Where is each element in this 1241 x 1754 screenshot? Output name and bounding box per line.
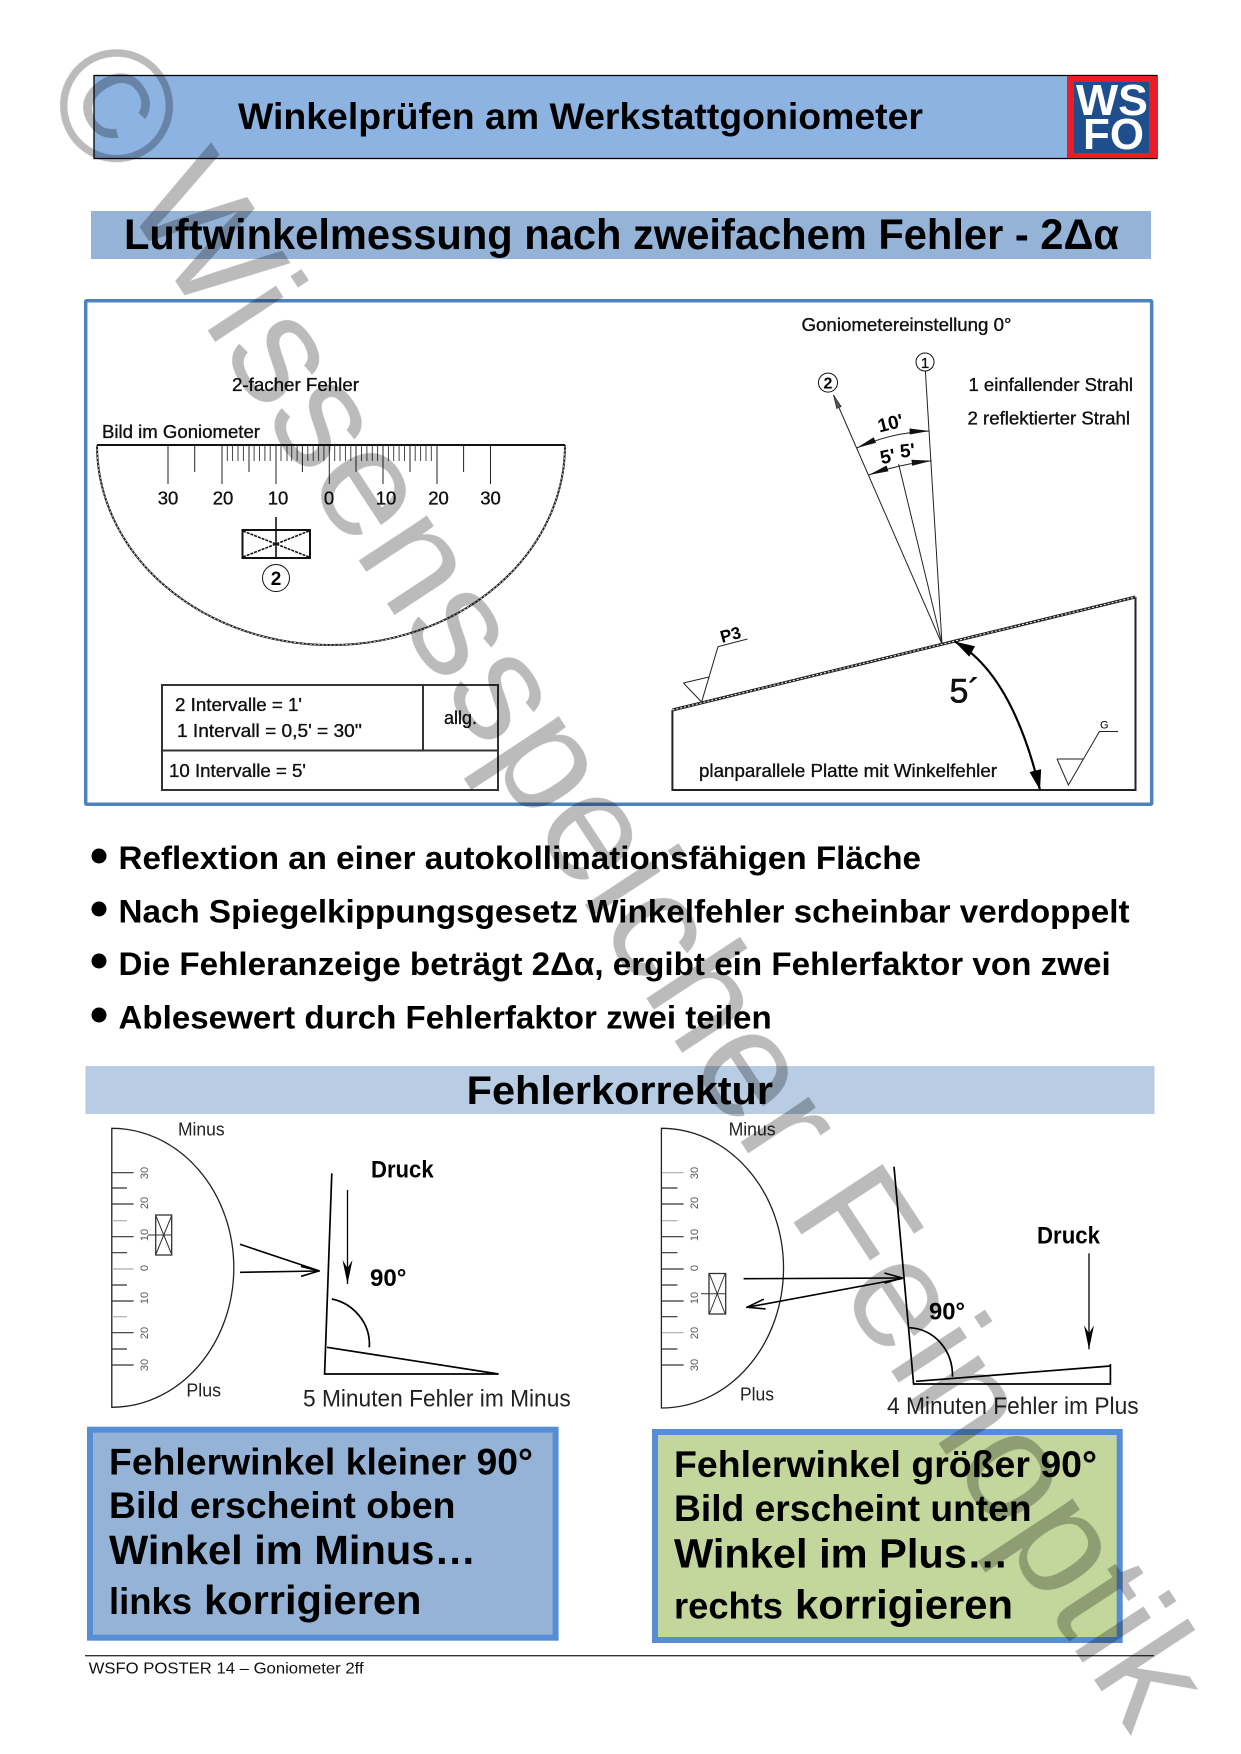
callout: error angle above 90 <box>655 1432 1120 1640</box>
legend: rays: 1 einfallender Strahl <box>968 375 1133 395</box>
callout: error angle above 90: Winkel im Plus… <box>674 1531 1008 1577</box>
pressure arrow <box>346 1190 348 1284</box>
rotated scale numbers <box>139 1167 151 1371</box>
watermark: © <box>10 7 224 204</box>
bullet 1: Reflextion an einer autokollimationsfähigen Fläche <box>118 840 921 876</box>
rotated scale numbers: 30 <box>139 1359 151 1371</box>
light rays <box>240 1244 319 1272</box>
label: 90 degrees: 90° <box>370 1265 406 1292</box>
diagram: error in minus <box>112 1120 571 1413</box>
heading band: Fehlerkorrektur: Fehlerkorrektur <box>467 1069 773 1113</box>
legend: rays <box>968 375 1133 428</box>
pressure arrow <box>1088 1253 1090 1349</box>
bullet 4: Ablesewert durch Fehlerfaktor zwei teilen <box>118 999 772 1035</box>
label: Druck: Druck <box>1037 1222 1101 1249</box>
callout: error angle below 90: links <box>109 1581 192 1622</box>
callout: error angle below 90: Winkel im Minus… <box>109 1527 476 1573</box>
circled numbers: 2 <box>824 376 833 392</box>
rotated scale numbers: 0 <box>139 1265 151 1271</box>
heading band: Fehlerkorrektur <box>86 1066 1154 1114</box>
table: intervals: 10 Intervalle = 5' <box>169 761 306 781</box>
bullet 2: Nach Spiegelkippungsgesetz Winkelfehler scheinbar verdoppelt <box>118 894 1130 930</box>
rotated scale numbers: 30 <box>689 1359 701 1371</box>
light rays <box>744 1278 902 1307</box>
reticle left <box>112 1120 234 1407</box>
circled number 2: 2 <box>271 569 281 590</box>
scale numbers: 30 <box>158 488 178 508</box>
diagram: reflection on plate <box>672 315 1136 790</box>
label: Minus: Minus <box>178 1120 225 1140</box>
scale numbers: 20 <box>213 488 233 508</box>
angle labels <box>876 411 916 469</box>
semicircle reticle <box>97 445 565 645</box>
label: Minus: Minus <box>729 1120 776 1140</box>
logo: WSFO: FO <box>1083 110 1144 159</box>
angle labels: 5' <box>878 446 897 469</box>
wedge <box>325 1173 499 1374</box>
scale numbers: 10 <box>376 488 396 508</box>
rays <box>834 373 942 644</box>
rotated scale numbers <box>689 1167 701 1371</box>
rotated scale numbers: 30 <box>689 1167 701 1179</box>
crosshair box <box>701 1274 726 1314</box>
legend: rays: 2 reflektierter Strahl <box>968 408 1130 428</box>
callout: error angle above 90: Fehlerwinkel größer 90° <box>674 1444 1097 1485</box>
table: intervals: allg. <box>444 708 477 728</box>
label: Druck: Druck <box>371 1156 434 1183</box>
scale numbers: 0 <box>324 488 334 508</box>
header bar <box>94 76 1157 159</box>
angle labels: 5' <box>899 440 916 463</box>
callout: error angle below 90 <box>90 1430 556 1638</box>
scale numbers: 30 <box>480 488 501 508</box>
diagram: Bild im Goniometer scale <box>97 375 565 645</box>
surface symbol P3: P3 <box>718 623 743 647</box>
surface symbol G: G <box>1100 720 1109 732</box>
watermark: Wissensspeicher Feinoptik <box>94 123 1241 1754</box>
scale numbers: 10 <box>268 488 288 508</box>
logo: WSFO: WS <box>1076 76 1148 125</box>
label: plate description: planparallele Platte mit Winkelfehler <box>699 761 997 781</box>
callout: error angle above 90: rechts <box>674 1586 783 1627</box>
label: Plus: Plus <box>186 1381 221 1401</box>
plate <box>672 597 1136 790</box>
title: Winkelprüfen am Werkstattgoniometer <box>238 95 923 137</box>
table: intervals: 2 Intervalle = 1' <box>175 695 302 715</box>
caption: 5 Minuten Fehler im Minus <box>303 1386 571 1413</box>
rotated scale numbers: 10 <box>139 1229 151 1241</box>
callout: error angle above 90: Bild erscheint unten <box>674 1488 1032 1529</box>
wedge <box>894 1167 1110 1384</box>
circled number 2 <box>262 564 290 592</box>
rotated scale numbers: 20 <box>689 1327 701 1339</box>
footer: WSFO POSTER 14 – Goniometer 2ff <box>89 1660 364 1677</box>
label: Bild im Goniometer: Bild im Goniometer <box>102 422 260 442</box>
reticle right <box>661 1120 784 1408</box>
panel: diagrams <box>86 301 1152 804</box>
callout: error angle above 90: korrigieren <box>795 1582 1013 1628</box>
angle labels: 10' <box>876 411 906 437</box>
crosshair box <box>242 517 310 558</box>
scale numbers <box>158 488 501 508</box>
angle arc 5 minutes <box>955 642 1040 790</box>
label: 2-facher Fehler: 2-facher Fehler <box>232 375 359 395</box>
surface symbol G <box>1057 720 1118 785</box>
table: intervals: 1 Intervall = 0,5' = 30'' <box>177 721 362 741</box>
diagram: error in plus <box>661 1120 1139 1420</box>
rotated scale numbers: 20 <box>139 1197 151 1209</box>
angle dimensions <box>857 431 932 475</box>
rotated scale numbers: 30 <box>139 1167 151 1179</box>
bullet list <box>92 840 1130 1035</box>
rotated scale numbers: 0 <box>689 1265 701 1271</box>
scale numbers: 20 <box>428 488 449 508</box>
rotated scale numbers: 20 <box>689 1197 701 1209</box>
circled numbers: 1 <box>921 355 929 372</box>
table: intervals <box>162 685 498 790</box>
rotated scale numbers: 10 <box>139 1292 151 1304</box>
rotated scale numbers: 10 <box>689 1229 701 1241</box>
caption: 4 Minuten Fehler im Plus <box>887 1393 1139 1420</box>
rotated scale numbers: 20 <box>139 1327 151 1339</box>
crosshair box <box>148 1215 172 1255</box>
label: 5 minutes: 5´ <box>950 672 980 710</box>
callout: error angle below 90: Bild erscheint oben <box>109 1485 455 1526</box>
rotated scale numbers: 10 <box>689 1292 701 1304</box>
label: Plus: Plus <box>740 1385 774 1405</box>
logo: WSFO <box>1067 76 1157 159</box>
label: Goniometereinstellung: Goniometereinstellung 0° <box>802 315 1012 335</box>
surface symbol P3 <box>683 623 748 702</box>
heading band: Luftwinkelmessung: Luftwinkelmessung nach zweifachem Fehler - 2Δα <box>124 212 1119 259</box>
callout: error angle below 90: Fehlerwinkel kleiner 90° <box>109 1441 533 1482</box>
bullet 3: Die Fehleranzeige beträgt 2Δα, ergibt ein Fehlerfaktor von zwei <box>118 946 1111 982</box>
label: 90 degrees: 90° <box>929 1298 965 1325</box>
circled numbers <box>818 353 934 392</box>
callout: error angle below 90: korrigieren <box>204 1577 422 1623</box>
